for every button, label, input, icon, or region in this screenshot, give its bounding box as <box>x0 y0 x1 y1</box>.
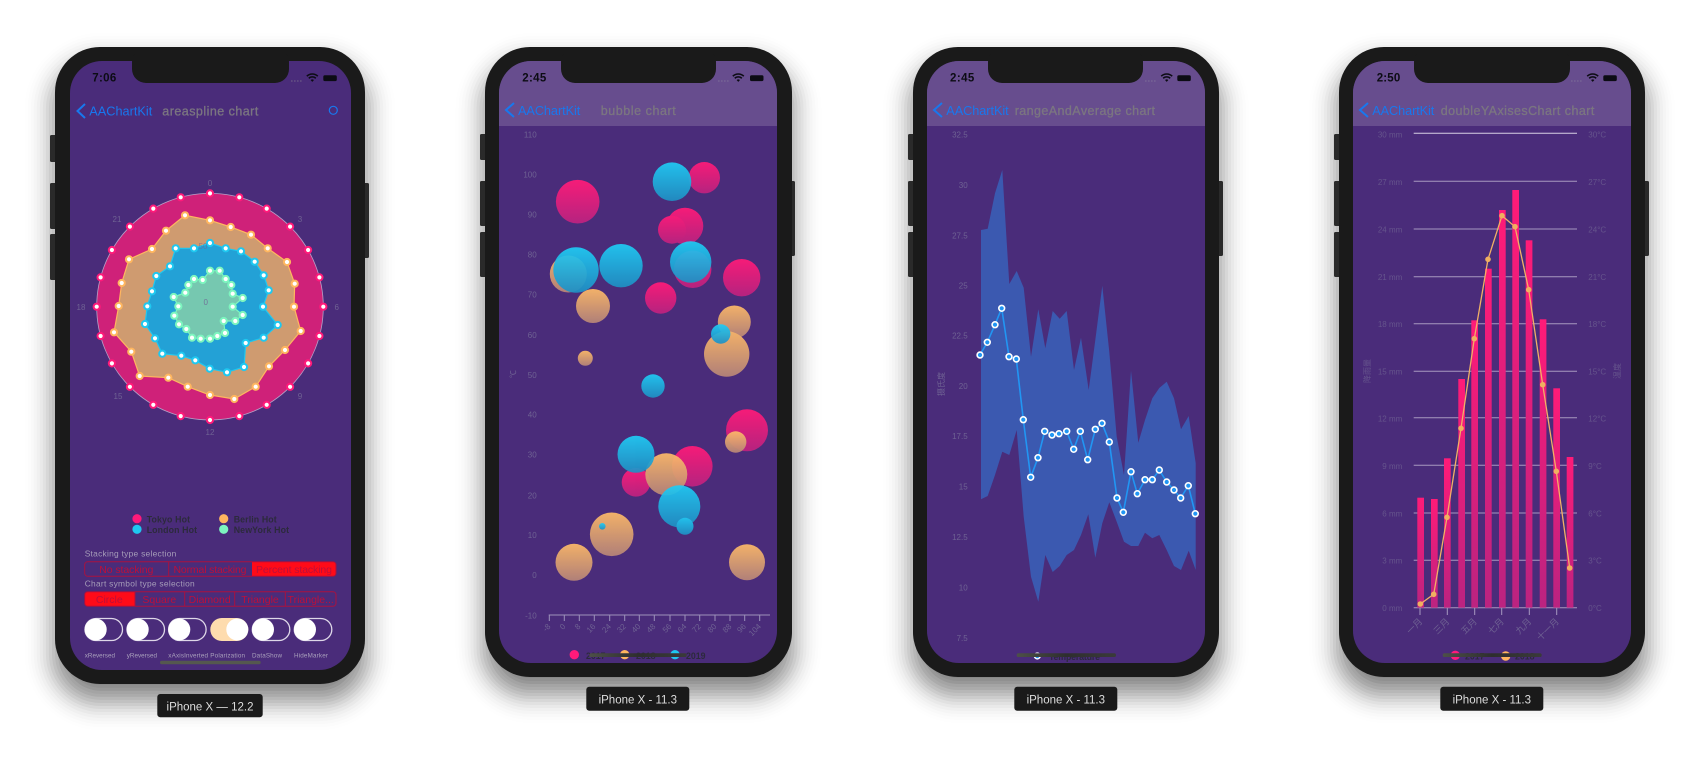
y axis: 10 <box>959 583 968 592</box>
panel: phone 3 range and average chart <box>908 47 1223 677</box>
toggle switches: DataShow <box>252 653 282 660</box>
x axis <box>1405 608 1561 643</box>
bubble series <box>550 162 768 581</box>
toggle switches: HideMarker <box>294 653 328 660</box>
y axis: ℃ <box>509 370 518 378</box>
x axis: 十一月 <box>1534 616 1561 643</box>
x axis: 三月 <box>1432 616 1451 636</box>
device label 4: iPhone X - 11.3 <box>1453 695 1531 707</box>
y axis: -10 <box>525 612 537 621</box>
symbol type selector: Square <box>142 594 176 606</box>
device label 2: iPhone X - 11.3 <box>599 695 677 707</box>
left y axis: 6 mm <box>1382 510 1403 518</box>
y axis: 0 <box>532 571 537 580</box>
right y axis: 24°C <box>1588 226 1606 234</box>
polar area chart: 3 <box>298 215 303 224</box>
right y axis: 21°C <box>1588 273 1606 282</box>
symbol type selector: Triangle... <box>288 594 334 606</box>
x axis: 40 <box>630 622 643 635</box>
symbol type selector: Triangle <box>241 594 279 606</box>
polar area chart: 18 <box>77 303 86 312</box>
chart legend: 2019 <box>686 651 706 661</box>
right y axis: 27°C <box>1588 178 1606 187</box>
device label 3: iPhone X - 11.3 <box>1027 695 1105 707</box>
stacking type selector <box>85 549 336 576</box>
left y axis: 21 mm <box>1378 273 1403 282</box>
x axis: 8 <box>573 622 583 632</box>
stacking type selector: Normal stacking <box>174 564 247 576</box>
y axis: 12.5 <box>952 533 968 542</box>
x axis: -8 <box>541 622 553 633</box>
device label 1 <box>157 694 263 717</box>
x axis: 一月 <box>1405 616 1424 636</box>
chart legend: London Hot <box>147 525 197 535</box>
y axis: 20 <box>959 382 968 391</box>
left y axis: 18 mm <box>1378 320 1403 329</box>
x axis: 16 <box>585 622 598 635</box>
panel: phone 2 bubble chart: bubble chart <box>601 104 676 118</box>
y axis: 50 <box>528 371 537 380</box>
left y axis: 27 mm <box>1378 178 1403 187</box>
panel: phone 1 areaspline chart: 7:06 <box>92 73 116 85</box>
chart legend: Tokyo Hot <box>147 514 190 524</box>
right y axis: 15°C <box>1588 368 1606 377</box>
y axis <box>509 130 537 621</box>
x axis: 32 <box>615 622 628 635</box>
y axis: 80 <box>528 251 537 260</box>
panel: phone 2 bubble chart <box>480 47 795 677</box>
polar area chart: 6 <box>334 303 339 312</box>
x axis: 56 <box>661 622 674 635</box>
panel: phone 4 double Y axes chart: 2:50 <box>1377 73 1400 85</box>
chart legend: 2017 <box>1465 652 1485 662</box>
y axis: 40 <box>528 411 537 420</box>
chart legend <box>570 650 706 661</box>
y axis: 25 <box>959 282 968 291</box>
x axis: 五月 <box>1459 616 1479 636</box>
device label 1: iPhone X — 12.2 <box>167 701 253 713</box>
y axis: 7.5 <box>957 634 968 643</box>
y axis <box>936 130 968 643</box>
temperature line with markers <box>1418 213 1572 607</box>
chart legend: 2017 <box>586 651 606 661</box>
y axis: 30 <box>959 181 968 190</box>
y axis: 22.5 <box>952 331 968 340</box>
panel: phone 1 areaspline chart <box>50 47 369 684</box>
right y axis: 温度 <box>1612 363 1622 379</box>
polar area chart <box>77 179 339 437</box>
x axis <box>541 615 770 638</box>
chart legend: 2018 <box>636 651 656 661</box>
device label 3 <box>1014 687 1117 711</box>
y axis: 30 <box>528 451 537 460</box>
y axis: 70 <box>528 291 537 300</box>
toggle switches: xAxisInverted <box>168 653 208 660</box>
y axis: 27.5 <box>952 231 968 240</box>
y axis: 32.5 <box>952 130 968 139</box>
chart legend: Berlin Hot <box>234 514 277 524</box>
left y axis: 30 mm <box>1378 130 1403 139</box>
panel: phone 2 bubble chart: 2:45 <box>522 73 547 85</box>
left y axis: 24 mm <box>1378 226 1403 234</box>
left y axis: 降雨量 <box>1362 359 1372 383</box>
right y axis: 12°C <box>1588 414 1606 424</box>
toggle switches: yReversed <box>127 653 157 660</box>
y axis: 17.5 <box>952 432 968 441</box>
polar area chart: 0 <box>203 298 208 307</box>
y axis: 90 <box>528 210 537 220</box>
panel: phone 3 range and average chart: AAChartKit <box>946 104 1009 118</box>
panel: phone 3 range and average chart: 2:45 <box>950 73 975 85</box>
polar area chart: 21 <box>113 215 122 224</box>
left y axis: 9 mm <box>1382 462 1403 471</box>
panel: phone 3 range and average chart: rangeAndAverage chart <box>1015 104 1156 118</box>
symbol type selector: Chart symbol type selection <box>85 579 195 589</box>
x axis: 104 <box>747 622 763 638</box>
polar area chart: 15 <box>114 392 123 401</box>
panel: phone 4 double Y axes chart: doubleYAxisesChart chart <box>1441 104 1595 118</box>
panel: phone 1 areaspline chart: AAChartKit <box>89 104 153 118</box>
toggle switches <box>85 618 332 660</box>
average line with markers <box>977 305 1198 517</box>
polar area chart: 0 <box>208 179 213 188</box>
right y axis: 9°C <box>1588 462 1602 471</box>
x axis: 七月 <box>1486 616 1506 636</box>
chart legend <box>1451 651 1535 662</box>
y axis: 60 <box>528 331 537 340</box>
panel: phone 1 areaspline chart: areaspline chart <box>162 104 259 118</box>
x axis: 九月 <box>1514 616 1533 636</box>
y axis: 15 <box>959 483 968 492</box>
y axis: 110 <box>524 130 537 139</box>
x axis: 0 <box>558 622 568 632</box>
left y axis: 15 mm <box>1378 368 1403 377</box>
y axis: 摄氏度 <box>936 372 946 396</box>
polar area chart: 9 <box>298 392 303 401</box>
x axis: 48 <box>645 622 658 635</box>
right y axis: 30°C <box>1588 130 1606 139</box>
right y axis <box>1588 130 1622 613</box>
chart legend: NewYork Hot <box>234 525 289 535</box>
x axis: 64 <box>676 622 689 635</box>
device label 2 <box>586 687 689 711</box>
polar area chart: 50 <box>199 242 208 251</box>
symbol type selector <box>85 579 336 606</box>
rainfall bars <box>1417 190 1573 608</box>
stacking type selector: No stacking <box>99 564 153 576</box>
right y axis: 6°C <box>1588 510 1602 518</box>
polar area chart: 12 <box>206 428 215 437</box>
panel: phone 4 double Y axes chart <box>1334 47 1649 677</box>
symbol type selector: Diamond <box>189 594 231 606</box>
stacking type selector: Percent stacking <box>256 564 332 576</box>
left y axis: 3 mm <box>1382 556 1403 566</box>
chart legend: 2018 <box>1515 652 1535 662</box>
x axis: 24 <box>600 622 613 635</box>
right y axis: 18°C <box>1588 320 1606 329</box>
right y axis: 0°C <box>1588 604 1602 613</box>
x axis: 80 <box>706 622 719 635</box>
toggle switches: Polarization <box>210 653 245 660</box>
right y axis: 3°C <box>1588 556 1602 566</box>
range area <box>981 170 1196 602</box>
chart legend: Temperature <box>1049 652 1100 662</box>
x axis: 96 <box>735 622 748 635</box>
y axis: 20 <box>528 492 537 501</box>
left y axis: 0 mm <box>1382 604 1403 613</box>
y axis: 10 <box>528 531 537 540</box>
left y axis: 12 mm <box>1378 414 1403 424</box>
y axis: 100 <box>523 170 537 179</box>
toggle switches: xReversed <box>85 653 115 660</box>
x axis: 88 <box>721 622 734 635</box>
symbol type selector: Circle <box>96 594 123 606</box>
panel: phone 4 double Y axes chart: AAChartKit <box>1372 104 1435 118</box>
stacking type selector: Stacking type selection <box>85 549 177 559</box>
left y axis <box>1362 130 1403 613</box>
panel: phone 2 bubble chart: AAChartKit <box>518 104 581 118</box>
x axis: 72 <box>690 622 703 635</box>
device label 4 <box>1440 687 1543 711</box>
chart legend <box>132 514 289 535</box>
